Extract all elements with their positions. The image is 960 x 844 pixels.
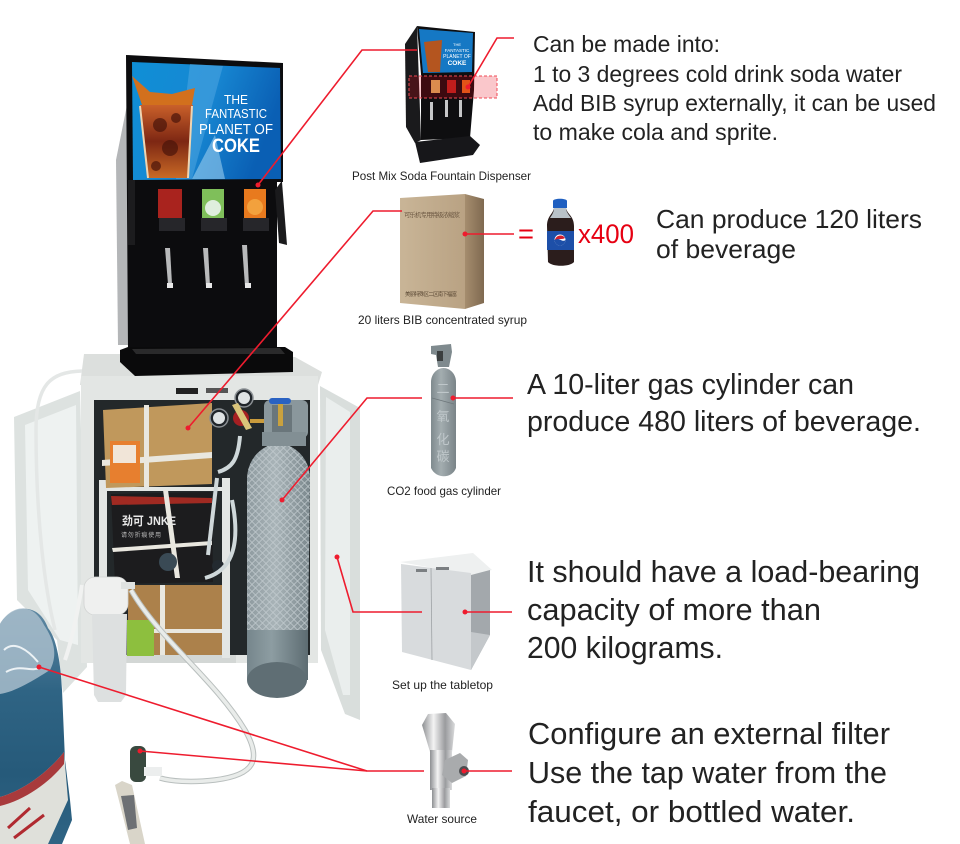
left door [14,391,87,693]
caption: output of syrup [656,204,922,264]
small flavor labels [431,80,470,93]
cylinder vertical text: 氧 [436,409,450,424]
soda glass [140,105,193,178]
small screen slogan: PLANET OF [443,54,471,60]
text: load bearing: It should have a load-bearing [527,554,920,589]
text: load bearing [527,554,920,665]
small closed cabinet [400,553,492,670]
caption: cylinder: CO2 food gas cylinder [387,484,501,498]
side panel [116,100,130,345]
small dispenser with highlighted valve area [405,26,497,163]
CO2 cylinder [247,398,310,698]
box label top: 可乐机专用特级浓缩浆 [404,210,461,219]
water cabinet with open doors [0,354,360,844]
text: gas cylinder: produce 480 liters of beverage. [527,406,921,438]
callout endpoints [36,84,470,774]
small screen slogan [443,42,471,67]
screen slogan [199,92,273,157]
text: dispenser usage: to make cola and sprite. [533,119,778,145]
cabinet front frame [81,376,318,663]
flavor label cola [158,189,185,231]
cylinder vertical text: 二 [436,381,450,396]
pressure gauges and regulator [210,389,272,430]
silicone tube to the tabletop [36,371,82,630]
text: gas cylinder: A 10-liter gas cylinder can [527,369,854,401]
spouts [165,245,249,286]
syrup box bottom [127,585,222,656]
screen slogan: PLANET OF [199,121,273,138]
text: dispenser usage: 1 to 3 degrees cold drink soda water [533,61,902,87]
bag brand text: 劲可 JNKE [122,513,176,528]
BIB syrup box [400,194,484,309]
small CO2 cylinder [431,344,456,476]
screen slogan: THE [224,92,248,107]
syrup bag black [111,490,224,584]
caption: dispenser: Post Mix Soda Fountain Dispenser [352,169,531,183]
bottled water [0,608,72,844]
small screen slogan: FANTASTIC [445,48,470,53]
flavor label orange [243,189,269,231]
screen slogan: COKE [212,136,260,157]
text: dispenser usage: Can be made into: [533,31,720,57]
text: dispenser usage [533,31,936,145]
right door [320,386,360,720]
text: dispenser usage: Add BIB syrup externally, it can be used [533,90,936,116]
text: load bearing: capacity of more than [527,592,821,627]
icon: angle valve [422,713,469,808]
cylinder vertical text: 碳 [436,449,450,464]
external water filter [65,577,135,702]
small spouts [430,100,462,120]
text: water: faucet, or bottled water. [528,794,855,829]
cylinder vertical text [436,381,450,464]
text: water [528,716,890,829]
flavor label lime [201,189,227,231]
small drip tray [415,136,480,163]
spout tips [167,283,251,288]
small screen slogan: THE [453,42,461,47]
equals sign: = [518,218,534,249]
screen [132,62,281,180]
screen slogan: FANTASTIC [205,106,267,121]
cylinder vertical text: 化 [436,432,450,447]
red callout lines [39,38,514,771]
text: water: Configure an external filter [528,716,890,751]
water hose [131,590,254,781]
caption: output of syrup: Can produce 120 liters [656,204,922,234]
text: load bearing: 200 kilograms. [527,630,723,665]
multiplier x400: x400 [578,219,634,249]
cabinet top surface [80,354,322,385]
syrup box top [102,403,212,488]
syrup bag black: 请勿折痕使用 [121,531,161,539]
icon: cola bottle [547,199,574,266]
text: water: Use the tap water from the [528,755,887,790]
tubes inside cabinet [205,436,240,578]
text: gas cylinder [527,369,921,438]
caption: water source: Water source [407,812,477,826]
main soda fountain dispenser [116,55,293,376]
right wing [275,182,287,245]
caption: output of syrup: of beverage [656,234,796,264]
drip tray [120,347,293,376]
small screen glass [424,40,442,72]
machine body [126,55,283,350]
dashed highlight [409,76,497,98]
tap and pipe [115,746,162,844]
caption: tabletop: Set up the tabletop [392,678,493,692]
left wing [128,180,135,245]
small screen slogan: COKE [448,60,467,67]
box label bottom: 美丽特殊区二区南下福富 [405,290,457,298]
white frame bars [99,478,230,658]
caption: syrup: 20 liters BIB concentrated syrup [358,313,527,327]
